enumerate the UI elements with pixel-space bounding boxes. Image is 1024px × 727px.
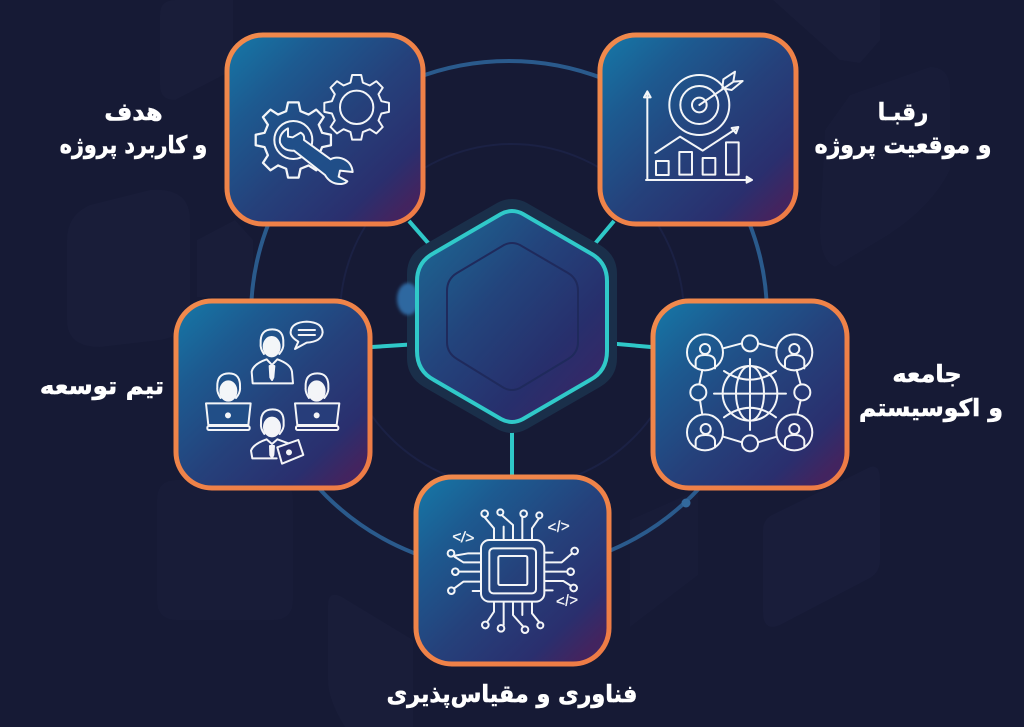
card: development team bbox=[176, 301, 370, 488]
right person with laptop bbox=[295, 373, 339, 430]
label: community and ecosystem: جامعه bbox=[892, 360, 962, 388]
label: community and ecosystem: و اکوسیستم bbox=[859, 394, 1003, 422]
card: community and ecosystem bbox=[653, 301, 847, 488]
top person bbox=[252, 329, 293, 383]
label: competitors and project position: و موقعیت پروژه bbox=[815, 132, 991, 159]
code tags: </> bbox=[451, 528, 475, 547]
code tags bbox=[451, 518, 579, 611]
label: technology and scalability: فناوری و مقیاس‌پذیری bbox=[387, 680, 637, 708]
card: technology and scalability bbox=[416, 477, 609, 664]
icon: gears and wrench bbox=[256, 75, 389, 184]
code tags: </> bbox=[555, 592, 579, 611]
speech bubble bbox=[291, 322, 323, 349]
label: competitors and project position bbox=[815, 99, 991, 159]
outer ring bbox=[251, 61, 767, 571]
icon: network around globe bbox=[687, 334, 812, 451]
card: goal and use of project bbox=[227, 35, 423, 224]
label: goal and use of project: هدف bbox=[104, 98, 163, 126]
label: goal and use of project: و کاربرد پروژه bbox=[60, 132, 207, 159]
icon: team around laptops bbox=[206, 322, 339, 464]
icon: target and growth chart bbox=[644, 72, 752, 183]
left person with laptop bbox=[206, 373, 251, 430]
card: competitors and project position bbox=[600, 35, 796, 224]
label: development team: تیم توسعه bbox=[40, 371, 164, 400]
label: community and ecosystem bbox=[859, 360, 1003, 422]
bottom person with tablet bbox=[251, 409, 303, 464]
central hexagon bbox=[397, 199, 617, 433]
code tags: </> bbox=[547, 518, 571, 537]
label: competitors and project position: رقبـا bbox=[878, 99, 928, 126]
label: goal and use of project bbox=[60, 98, 207, 159]
connectors bbox=[372, 221, 651, 475]
icon: processor chip with circuits bbox=[448, 509, 579, 633]
